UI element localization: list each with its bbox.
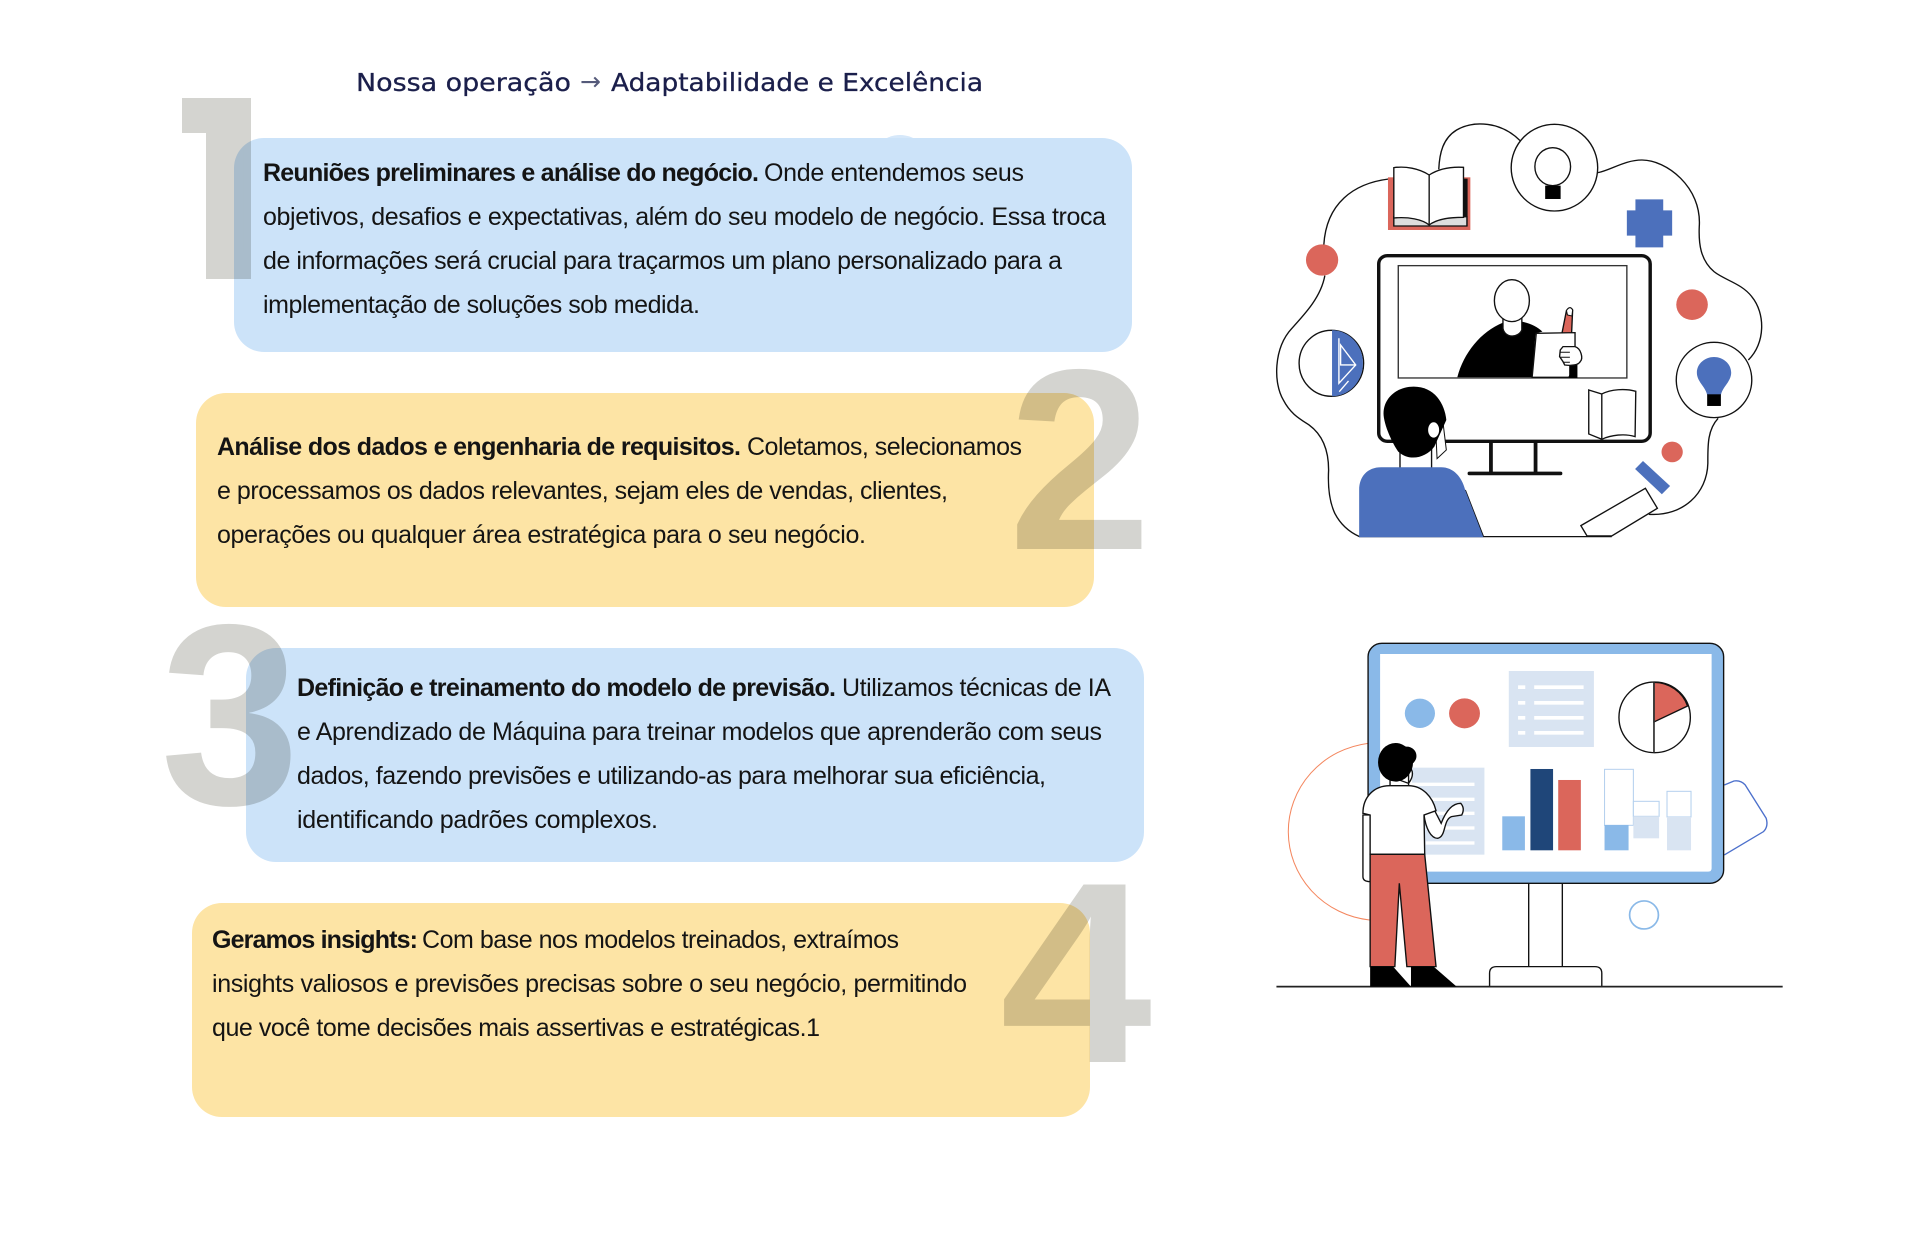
blue rounded shape <box>1724 781 1767 855</box>
panel: step 3: e Aprendizado de Máquina para treinar modelos que aprenderão com seus <box>297 718 1102 746</box>
icon: red book <box>1388 167 1470 230</box>
panel: step 4: insights valiosos e previsões precisas sobre o seu negócio, permitindo <box>212 970 967 998</box>
small circle <box>1630 901 1658 929</box>
person pointing <box>1363 743 1463 987</box>
title: Adaptabilidade e Excelência <box>611 68 983 97</box>
panel: step 3: Definição e treinamento do modelo de previsão. <box>297 674 836 702</box>
bar chart <box>1502 769 1581 850</box>
monitor <box>1379 256 1650 475</box>
display stand <box>1490 883 1602 987</box>
panel: step 2: Coletamos, selecionamos <box>747 433 1022 461</box>
icon: notepad and marker <box>1581 461 1670 536</box>
panel: step 1: objetivos, desafios e expectativas, além do seu modelo de negócio. Essa troca <box>263 203 1106 231</box>
illustration: video call meeting <box>1277 124 1762 537</box>
number 4: 4 <box>1000 829 1154 1117</box>
number 2: 2 <box>1008 315 1152 604</box>
panel: step 2: operações ou qualquer área estratégica para o seu negócio. <box>217 521 866 549</box>
panel: step 1: Reuniões preliminares e análise do negócio. <box>263 159 759 187</box>
orange arc <box>1288 743 1369 920</box>
panel: step 4: Com base nos modelos treinados, extraímos <box>422 926 899 954</box>
dashboard display <box>1368 643 1724 883</box>
outlined bars <box>1605 769 1691 850</box>
number 1 <box>182 98 251 279</box>
text card <box>1412 768 1484 855</box>
panel: step 4 <box>192 903 1090 1117</box>
panel: step 2: Análise dos dados e engenharia de requisitos. <box>217 433 741 461</box>
icon: organic outline <box>1277 124 1762 537</box>
title <box>356 67 983 97</box>
icon: half circle diagram <box>1299 330 1364 396</box>
panel: step 1: Onde entendemos seus <box>764 159 1024 187</box>
icon: red dots <box>1306 244 1708 462</box>
panel: step 1 <box>234 138 1132 352</box>
floor line <box>1276 984 1783 989</box>
number 1: 1 <box>148 45 292 334</box>
icon: top light bulb <box>1511 124 1598 211</box>
panel: step 2 <box>196 393 1094 607</box>
dots <box>1405 698 1480 728</box>
panel: step 4: que você tome decisões mais assertivas e estratégicas.1 <box>212 1014 820 1042</box>
list card <box>1509 671 1594 747</box>
person seen from behind <box>1359 387 1483 537</box>
title: Nossa operação <box>356 68 571 97</box>
decorative circle behind panel 1 <box>870 135 930 195</box>
icon: blue light bulb <box>1676 342 1752 418</box>
panel: step 3: dados, fazendo previsões e utilizando-as para melhorar sua eficiência, <box>297 762 1046 790</box>
panel: step 3: Utilizamos técnicas de IA <box>842 674 1111 702</box>
pie chart <box>1619 682 1690 753</box>
panel: step 2: e processamos os dados relevantes, sejam eles de vendas, clientes, <box>217 477 948 505</box>
panel: step 4: Geramos insights: <box>212 926 418 954</box>
panel: step 3 <box>246 648 1144 862</box>
illustration: dashboard presentation <box>1276 643 1783 987</box>
panel: step 1: implementação de soluções sob medida. <box>263 291 700 319</box>
number 3: 3 <box>160 571 300 859</box>
panel: step 1: de informações será crucial para traçarmos um plano personalizado para a <box>263 247 1062 275</box>
icon: blue plus <box>1627 199 1672 247</box>
title: → <box>580 67 601 96</box>
panel: step 3: identificando padrões complexos. <box>297 806 658 834</box>
